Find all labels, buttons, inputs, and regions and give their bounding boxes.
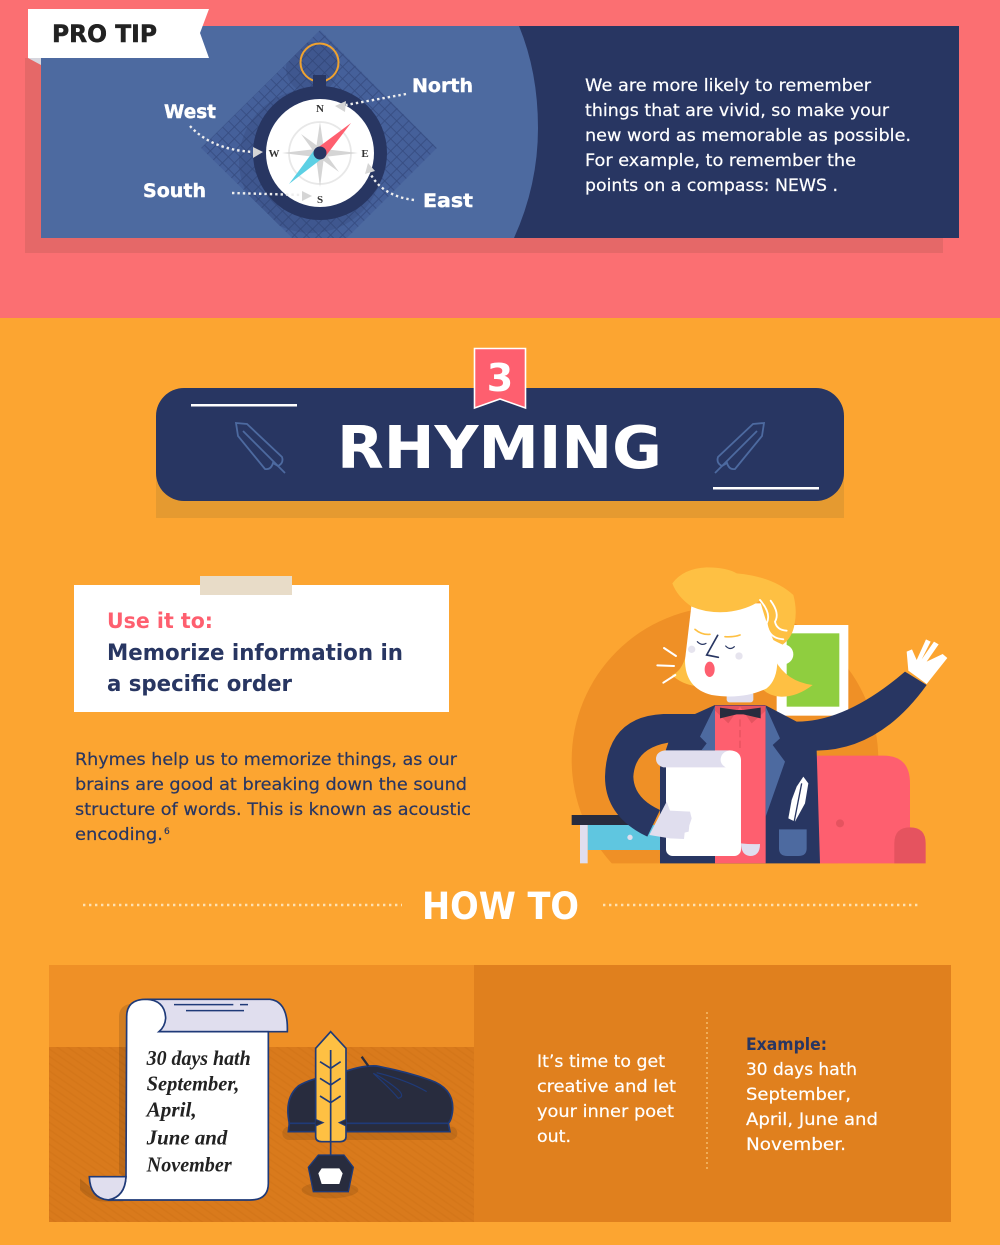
panel shadow	[25, 58, 943, 253]
beret	[288, 1057, 453, 1132]
panel: navy text side	[514, 26, 959, 238]
text: pro tip body: For example, to remember the	[585, 151, 856, 171]
icon: compass: S	[317, 194, 323, 206]
front hair	[672, 567, 796, 645]
label: east: East	[423, 190, 473, 212]
text: how to instruction: It’s time to get	[537, 1052, 665, 1072]
side table	[572, 815, 664, 863]
banner: rhyming heading	[156, 348, 844, 518]
scroll verse: November	[146, 1155, 233, 1177]
picture frame	[777, 625, 848, 716]
beret shadow	[282, 1127, 457, 1140]
quill	[316, 1032, 346, 1142]
facial features	[688, 629, 743, 677]
card text: Memorize information in	[107, 641, 403, 666]
text: rhyming explanation: structure of words. This is known as acoustic	[75, 800, 471, 820]
icon: compass: E	[361, 148, 369, 160]
title: rhyming: RHYMING	[337, 413, 662, 482]
text: how to instruction: creative and let	[537, 1077, 676, 1097]
scroll verse	[145, 1048, 251, 1177]
panel left top	[49, 965, 474, 1047]
icon: compass	[253, 44, 387, 220]
text: rhyming explanation: Rhymes help us to memorize things, as our	[75, 750, 457, 770]
card text: a specific order	[107, 672, 292, 697]
panel left patterned floor	[49, 1047, 474, 1222]
arrow: west	[190, 126, 263, 158]
text: example: 30 days hath	[746, 1060, 857, 1080]
pattern diamond	[201, 30, 437, 238]
panel: blue compass side	[41, 26, 959, 238]
card: use it to	[74, 576, 449, 712]
hair highlights	[760, 600, 787, 639]
raised hand	[907, 639, 947, 684]
scroll verse: April,	[145, 1100, 197, 1122]
collar	[715, 706, 766, 723]
panel: pro tip	[25, 9, 959, 253]
text: rhyming explanation: 6	[164, 827, 170, 837]
text: how to instruction	[537, 1052, 676, 1147]
shirt	[715, 706, 766, 863]
text: example: November.	[746, 1135, 846, 1155]
card label: Use it to:	[107, 609, 213, 633]
panel: how to	[49, 965, 951, 1222]
text: pro tip body: We are more likely to remember	[585, 76, 871, 96]
quill in pocket	[779, 777, 808, 856]
text: example: September,	[746, 1085, 851, 1105]
label: south: South	[143, 180, 206, 202]
heading: how to: HOW TO	[422, 885, 579, 928]
banner body	[156, 388, 844, 501]
text: how to instruction: your inner poet	[537, 1102, 674, 1122]
banner shadow	[156, 430, 844, 518]
text: example: Example:	[746, 1035, 827, 1055]
bow tie	[720, 708, 761, 718]
shirt stitching	[738, 719, 742, 750]
sofa	[813, 756, 926, 863]
badge: number 3	[474, 348, 526, 408]
ink bottle	[302, 1140, 358, 1198]
lapels	[700, 706, 785, 817]
text: rhyming explanation: encoding.	[75, 825, 163, 845]
card text	[107, 641, 403, 697]
jacket and arms	[605, 672, 927, 863]
badge: number 3: 3	[487, 356, 513, 400]
back hair left	[672, 655, 695, 686]
face	[685, 603, 793, 696]
arrow: east	[365, 163, 414, 200]
text: pro tip body: things that are vivid, so make your	[585, 101, 889, 121]
pointer arrow	[474, 1085, 488, 1103]
icon: compass: N	[316, 103, 324, 115]
scroll verse: June and	[146, 1127, 228, 1149]
paper scroll	[80, 999, 287, 1202]
panel right	[474, 965, 951, 1222]
icon: left feather	[236, 423, 285, 473]
illustration: poet reciting	[572, 568, 948, 864]
text: pro tip body: new word as memorable as possible.	[585, 126, 911, 146]
ribbon: pro tip	[28, 9, 209, 65]
section background: coral	[0, 0, 1000, 318]
illustration: scroll, beret, quill and ink	[80, 999, 457, 1202]
arrow: north	[335, 94, 406, 112]
label: north: North	[412, 75, 473, 97]
background circle	[572, 610, 878, 864]
tape	[200, 576, 292, 595]
label: west: West	[164, 101, 216, 123]
left hand	[649, 802, 692, 839]
text: example	[746, 1035, 878, 1155]
text: example: April, June and	[746, 1110, 878, 1130]
neck	[727, 692, 753, 702]
back hair right	[763, 660, 813, 697]
text: rhyming explanation	[75, 750, 471, 845]
icon: right feather	[715, 423, 764, 473]
text: how to instruction: out.	[537, 1127, 571, 1147]
sound lines	[657, 648, 676, 683]
arrow: south	[232, 191, 312, 201]
scroll	[656, 750, 760, 856]
scroll verse: 30 days hath	[146, 1048, 251, 1070]
scroll verse: September,	[147, 1074, 239, 1096]
text: pro tip body: points on a compass: NEWS .	[585, 176, 838, 196]
icon: compass: W	[268, 148, 280, 160]
ribbon: pro tip: PRO TIP	[52, 20, 157, 48]
text: pro tip body	[585, 76, 911, 196]
text: rhyming explanation: brains are good at breaking down the sound	[75, 775, 467, 795]
section background: orange	[0, 318, 1000, 1245]
